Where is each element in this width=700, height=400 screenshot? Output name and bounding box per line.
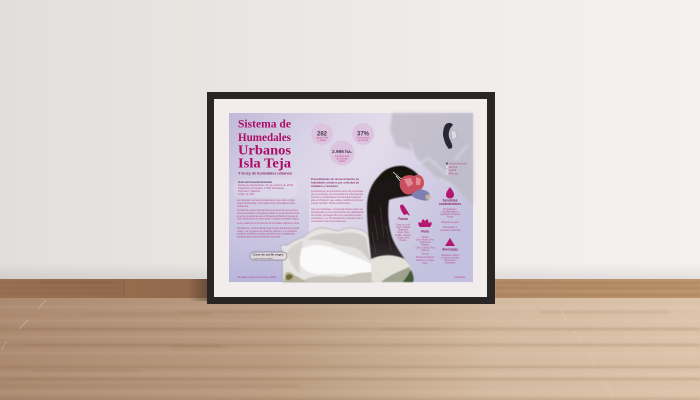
caruncle highlight (404, 177, 421, 187)
left body text: Actualmente, el Humedal Isla Teja ha sido declarado humedal (237, 227, 299, 230)
services heading: ecosistémicos (439, 202, 461, 206)
icon: lotus (418, 219, 432, 227)
middle body text: por el municipio, que acompaña los antecedentes (311, 193, 364, 196)
flora list: Luma, Arrayán, Temu (416, 238, 435, 242)
fauna list: Huairavos (398, 228, 409, 232)
services list: educación ambiental (440, 229, 460, 232)
left body text: para la biodiversidad y el bienestar de las comunidades locales (237, 202, 296, 205)
wetland facts box: Fecha de declaración: 21 de octubre de 2020 (238, 184, 294, 187)
title (238, 118, 292, 172)
map legend: Humedal urbano Isla Teja (449, 162, 467, 166)
fauna heading: Fauna (398, 217, 408, 221)
services list: Regulación (444, 208, 457, 211)
threats list: Urbanización, rellenos (441, 254, 460, 257)
left body text: de estos ecosistemas ante el Ministerio del Medio Ambiente de (237, 215, 299, 218)
services heading: Servicios (442, 198, 458, 202)
left body text: urbano, por su aporte a la ciudad de Valdivia y a su población (237, 230, 298, 233)
middle body text: ecológicas y su funcionamiento natural frente a (311, 217, 364, 220)
middle body text: nuevas intervenciones. (311, 220, 347, 223)
threats list: Desecación (444, 259, 456, 262)
swan body (280, 228, 374, 282)
left body text: urbanas. (237, 205, 249, 208)
stat: 282: especies de flora (316, 136, 328, 140)
flora list: Helechos y musgos (416, 259, 435, 262)
bill tip (425, 194, 431, 200)
wooden baseboard (0, 279, 700, 301)
fauna section (396, 204, 411, 242)
middle heading: humedales urbanos por solicitud de (311, 180, 359, 184)
blue bill (411, 189, 430, 201)
threats heading: Amenazas (442, 248, 458, 252)
services list: lluvia (447, 216, 454, 218)
middle body text: considerado en los instrumentos de planificación (311, 211, 365, 214)
middle body text: territorial, protegiendo sus características (311, 214, 362, 217)
chest shade (381, 267, 413, 282)
flora list: Otras (422, 262, 428, 265)
left body text: a las comunidades y municipios solicitar el reconocimiento oficial (237, 212, 299, 215)
middle body text: Una vez declarado, el humedal urbano debe ser (311, 208, 363, 211)
species label (250, 252, 287, 260)
stat: 2.966 ha.: urbano (338, 160, 346, 163)
left body text: fundamentales para el desarrollo sostenible. (237, 236, 281, 238)
middle body text: técnicos y la delimitación del humedal propuesto (311, 196, 362, 199)
swan chest (371, 255, 413, 282)
flora heading: Flora (421, 230, 429, 234)
white eye stripe (393, 172, 405, 183)
services list (440, 208, 461, 232)
title: Sistema de (238, 118, 291, 130)
threats list: Contaminación (444, 262, 456, 264)
wetland facts box: Comuna: Valdivia (238, 190, 261, 193)
stat: 37%: de la superficie (356, 136, 370, 140)
wetland map background (390, 113, 473, 206)
stat: 37%: de Isla Teja (358, 139, 369, 142)
icon: bird (400, 204, 410, 216)
middle body text: ante el ministerio, que evalúa y publica el proceso (311, 199, 364, 202)
author credit: Infografía (454, 276, 466, 279)
flora list: Hierba del platero (416, 256, 435, 259)
wall bottom shading (0, 0, 700, 280)
wetland facts box: Ficha del humedal declarado (238, 181, 273, 184)
fauna list: Peces (400, 239, 407, 242)
services list: Recreación y (443, 226, 458, 229)
services heading (439, 198, 461, 206)
wetland facts box (233, 179, 298, 198)
title: Isla Teja (238, 156, 291, 172)
flora list (416, 236, 435, 265)
icon: warning triangle (445, 238, 455, 246)
map legend: Ríos (449, 172, 459, 176)
red caruncle (400, 175, 424, 195)
left body text: Los humedales, reservorios de agua dulce de gran valor ecológico (237, 199, 296, 202)
poster infographic (229, 113, 473, 282)
fauna list: Culebra, Pitío (397, 236, 410, 240)
wetland facts box: Superficie protegida: 2.966 hectáreas (238, 187, 285, 190)
left body text: Chile, favoreciendo su conservación y manejo sustentable urbano. (237, 218, 299, 220)
middle heading: Procedimiento de reconocimiento de (311, 177, 359, 181)
fauna list: Coipos, Sapo (397, 231, 410, 234)
wall background (0, 0, 700, 280)
chest dark edge (403, 270, 414, 282)
middle body text (311, 190, 365, 223)
middle body text: La solicitud de reconocimiento debe ser presentada (311, 190, 364, 193)
services list: Mitigación de agua (442, 221, 459, 224)
stat: 282 (311, 123, 333, 145)
services section (439, 187, 461, 232)
flora list: Chilco, Copihue, Pitra (416, 246, 435, 250)
neck feather streaks (372, 205, 391, 254)
threats list: y residuos, drenaje (441, 256, 460, 260)
stat: 282: y fauna (318, 139, 327, 142)
swan neck and head (367, 166, 420, 264)
fauna list (396, 224, 411, 242)
fauna list: Huillín, Garzas (396, 234, 411, 237)
stat: 37%: 37% (357, 132, 370, 138)
middle body text: para recibir observaciones. (311, 202, 351, 205)
poster lower-left tint (229, 180, 309, 282)
stat: 2.966 ha.: del humedal (336, 158, 348, 160)
flora list: Canelo (420, 241, 431, 244)
frame cast shadow (188, 279, 208, 301)
subtitle: Y la ley de humedales urbanos (238, 172, 292, 176)
middle heading: ciudadanos y municipios (311, 184, 338, 188)
fauna list: Cisne de cuello (396, 224, 411, 226)
services list: microclimática y (442, 210, 459, 214)
title: Humedales (238, 132, 291, 144)
left body text: La Ley establece reconocimiento de humedales urbanos en Chile (237, 222, 300, 225)
flora list: Junco (422, 252, 429, 256)
services list: regulación del agua (440, 213, 461, 216)
white mat (214, 99, 487, 297)
left body text (237, 199, 300, 238)
threats section (441, 238, 460, 264)
footer credit: Humedales urbanos en la Isla Teja, Valdivia (237, 276, 277, 279)
poster background (229, 113, 473, 282)
title: Urbanos (238, 144, 292, 158)
wetland facts box: Código: 10, 2020 (238, 193, 255, 196)
middle heading (311, 177, 359, 188)
flora section (416, 219, 435, 265)
wooden floor (0, 298, 700, 400)
flora list: Totora (422, 236, 429, 239)
species label: Cygnus melancoryphus (253, 257, 274, 260)
threats list (441, 254, 460, 264)
stat: 282: 282 (317, 132, 328, 138)
locator map (443, 123, 457, 149)
illustration: black-necked swan (280, 166, 431, 282)
map legend: Valdivia (449, 169, 457, 172)
fauna list: negro, Taguas (396, 226, 411, 229)
flora list: Nalca (421, 244, 430, 246)
stat: 2.966 ha.: superficie total (335, 155, 349, 158)
left body text: Actualmente existen diversas formas de protección que permiten (237, 209, 299, 212)
left body text: mediante múltiples servicios ecosistémicos y paisajísticos (237, 232, 296, 236)
map legend: Isla Teja (449, 166, 458, 169)
stat: 2.966 ha.: 2.966 ha. (332, 149, 352, 154)
map legend (446, 162, 467, 176)
black picture frame (207, 92, 495, 304)
stat: 2.966 ha. (330, 140, 354, 166)
stat: 37% (352, 123, 374, 145)
flora list: Ciprés (421, 249, 430, 252)
species label: Cisne de cuello negro (252, 253, 284, 257)
icon: water drop (446, 187, 454, 198)
